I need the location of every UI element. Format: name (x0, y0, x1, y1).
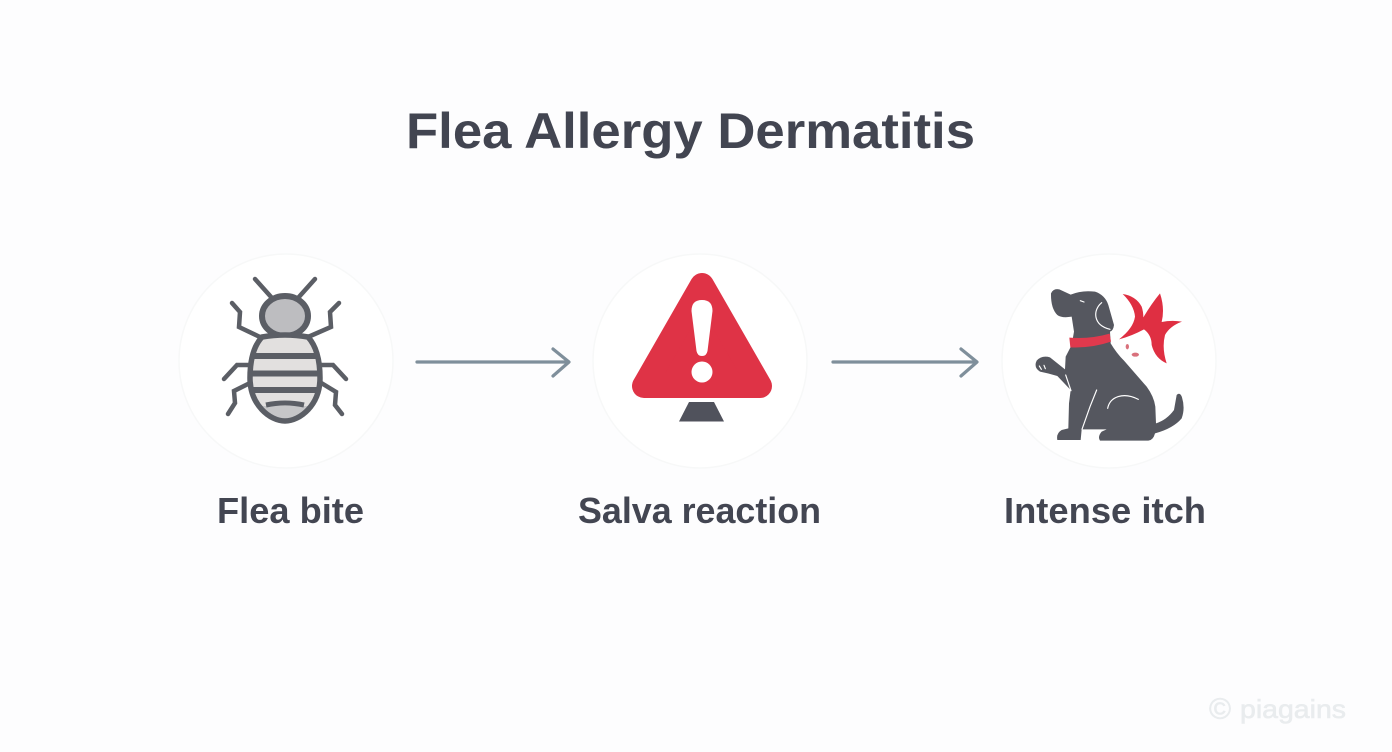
arrow 1 (417, 349, 569, 376)
watermark: © (1209, 693, 1231, 726)
step 1: flea bite (222, 276, 348, 424)
infographic canvas (219, 112, 1346, 724)
icon: scratching dog (1036, 289, 1184, 441)
arrow 2 (833, 349, 977, 376)
title: Flea Allergy Dermatitis (406, 103, 975, 159)
icon circle: warning (593, 254, 807, 468)
label: flea bite: Flea bite (217, 490, 364, 531)
icon circle: flea (179, 254, 393, 468)
icon: flea (224, 279, 346, 425)
icon circle: dog (1002, 254, 1216, 468)
step 2: saliva reaction (593, 254, 807, 468)
watermark (1209, 693, 1346, 726)
icon: warning triangle (644, 285, 760, 422)
label: salva reaction: Salva reaction (578, 490, 821, 531)
step 3: intense itch (1002, 254, 1216, 468)
watermark: piagains (1240, 694, 1346, 724)
label: intense itch: Intense itch (1004, 490, 1206, 531)
